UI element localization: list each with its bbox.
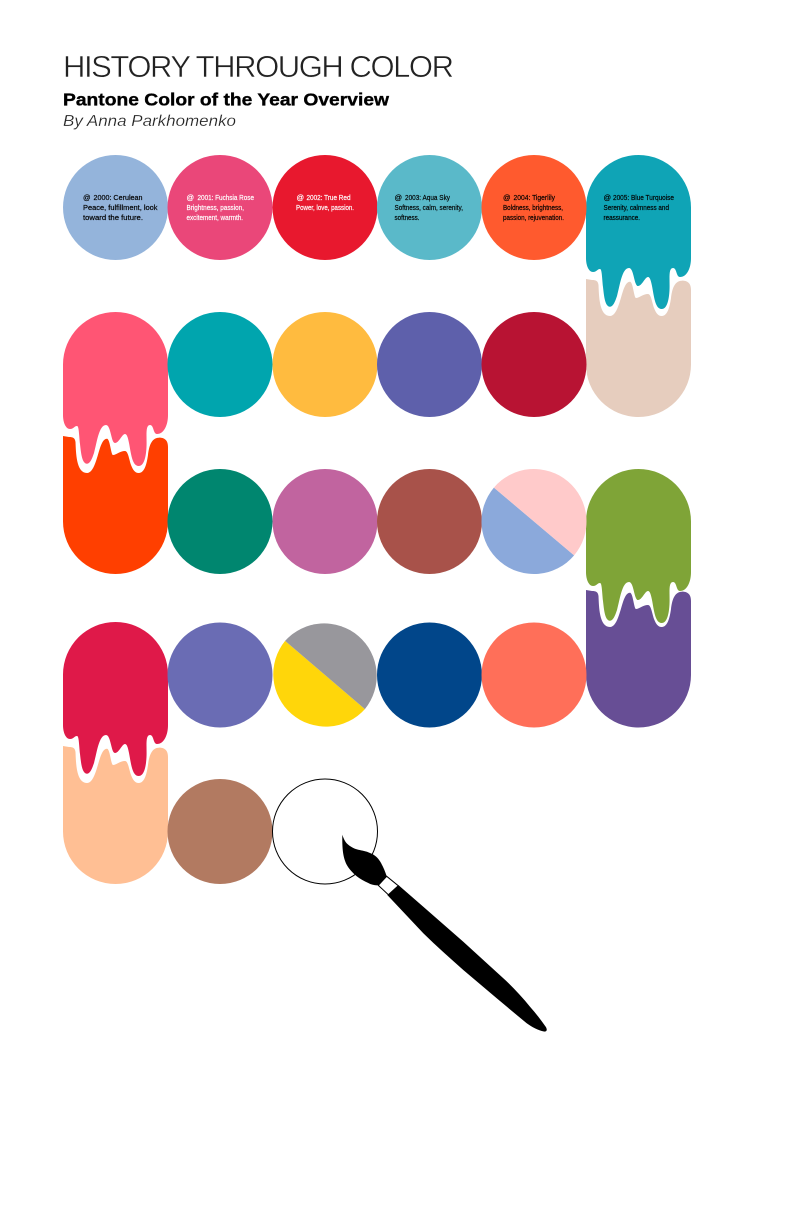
text: 2005 blue turquoise: 2005: Blue Turquoise [613,193,674,202]
text: 2003 aqua sky: 2003: Aqua Sky [405,193,450,202]
circle: row 2 mimosa [272,312,378,417]
text: 2004 tigerlily: passion, rejuvenation. [503,213,564,222]
circle: row 3 radiant orchid [272,469,378,574]
circle: 2004 tigerlily [482,155,586,260]
text: 2003 aqua sky: @ [394,193,402,202]
text: 2005 blue turquoise: Serenity, calmness and [604,203,669,212]
drip pair: blue turquoise over sand dollar [586,155,691,417]
brush head [342,835,387,885]
circle: row 3 rose quartz and serenity [481,469,587,574]
title: HISTORY THROUGH COLOR [63,49,454,84]
text: 2003 aqua sky: softness. [394,213,420,222]
circle: row 2 turquoise [168,312,272,417]
text: 2000 cerulean [83,193,158,222]
circle: row 5 empty outline [272,779,378,884]
text: 2005 blue turquoise [604,193,674,222]
circle: row 4 living coral [482,622,586,728]
byline: By Anna Parkhomenko [63,113,236,130]
circle: row 3 emerald [168,469,272,574]
circle: row 4 ultra violet [168,622,272,728]
text: 2001 fuchsia rose: Brightness, passion, [186,203,244,212]
text: 2001 fuchsia rose: @ [186,193,194,202]
circle: 2000 cerulean [63,155,168,260]
text: 2000 cerulean: Peace, fulfillment, look [83,203,158,212]
text: 2002 true red: 2002: True Red [306,193,350,202]
text: 2002 true red: Power, love, passion. [296,203,354,212]
circle: row 3 marsala [377,469,482,574]
text: 2001 fuchsia rose [186,193,254,222]
icon: paintbrush [342,835,547,1032]
text: 2004 tigerlily: Boldness, brightness, [503,203,563,212]
text: 2004 tigerlily [503,193,564,222]
text: 2001 fuchsia rose: 2001: Fuchsia Rose [198,193,254,202]
text: 2001 fuchsia rose: excitement, warmth. [186,213,243,222]
brush handle [387,885,547,1032]
text: 2000 cerulean: toward the future. [83,213,143,222]
text: 2002 true red [296,193,354,212]
drip pair: viva magenta over peach fuzz [63,622,168,884]
text: 2005 blue turquoise: reassurance. [604,213,640,222]
text: 2002 true red: @ [296,193,304,202]
circle: 2001 fuchsia rose [168,155,272,260]
text: 2005 blue turquoise: @ [604,193,611,202]
text: 2004 tigerlily: 2004: Tigerlily [514,193,555,202]
circle: row 4 classic blue [377,622,482,728]
text: 2004 tigerlily: @ [503,193,511,202]
brush ferrule [378,876,399,896]
drip pair: greenery over ultra violet [586,469,691,728]
circle: row 5 mocha [168,779,272,884]
drip pair: honeysuckle over tangerine tango [63,312,168,574]
text: 2003 aqua sky [394,193,463,222]
text: 2000 cerulean: 2000: Cerulean [94,193,142,202]
circle: row 2 chili pepper [482,312,586,417]
circle: row 2 blue iris [377,312,482,417]
text: 2000 cerulean: @ [83,193,91,202]
text: 2003 aqua sky: Softness, calm, serenity, [394,203,463,212]
subtitle: Pantone Color of the Year Overview [63,90,389,110]
circle: row 4 illuminating and ultimate gray [273,623,377,727]
circle: 2002 true red [272,155,378,260]
circle: 2003 aqua sky [377,155,482,260]
